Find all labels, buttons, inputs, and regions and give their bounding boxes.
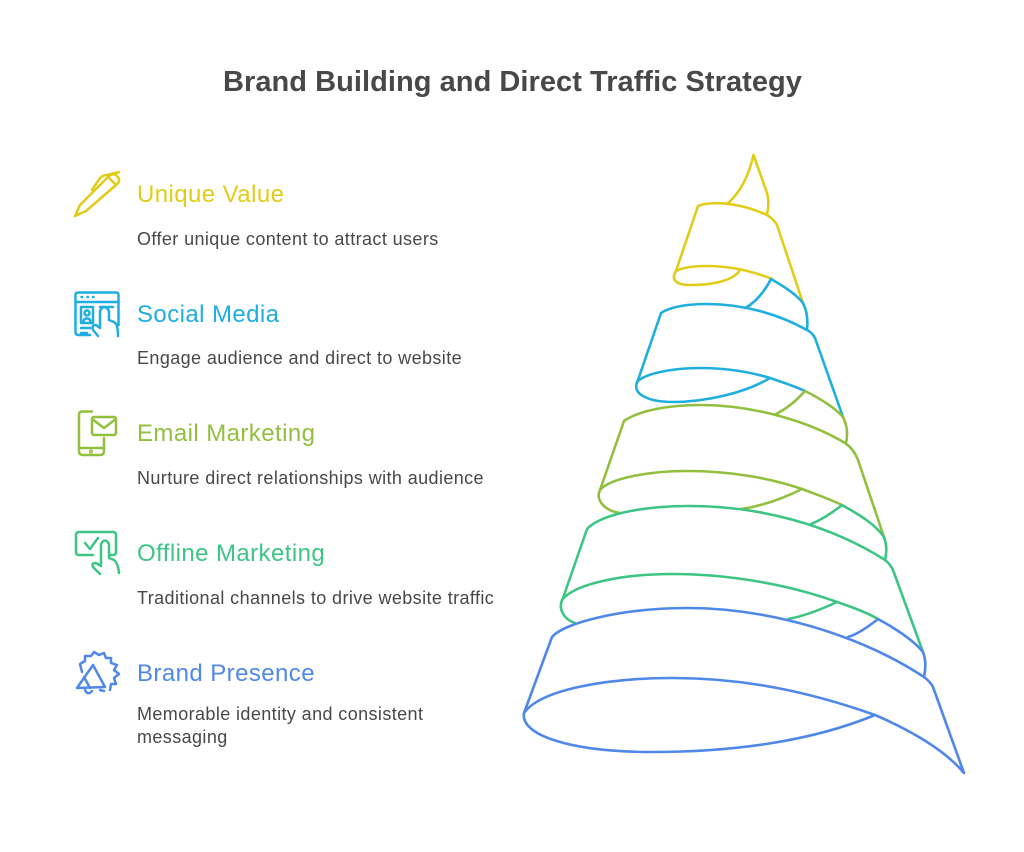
icon: social media browser — [76, 292, 118, 336]
spiral segment: sky blue — [636, 279, 843, 417]
spiral segment: blue — [524, 608, 964, 773]
heading: Social Media: Social Media — [137, 301, 279, 328]
text: Brand Presence description — [137, 704, 423, 747]
spiral cone — [524, 155, 964, 773]
heading: Email Marketing: Email Marketing — [137, 420, 315, 447]
text: Unique Value description: Offer unique content to attract users — [137, 229, 439, 249]
spiral segment: emerald green — [561, 505, 923, 652]
text: Social Media description: Engage audience and direct to website — [137, 348, 462, 368]
icon: pen — [75, 172, 119, 216]
text: Offline Marketing description: Traditional channels to drive website traffic — [137, 588, 494, 608]
heading: Unique Value: Unique Value — [137, 181, 284, 208]
text: Brand Presence description: messaging — [137, 727, 228, 747]
icon: megaphone badge — [77, 652, 119, 693]
heading: Brand Presence: Brand Presence — [137, 660, 315, 687]
heading: Offline Marketing: Offline Marketing — [137, 540, 325, 567]
icon: phone with envelope — [79, 412, 116, 455]
title: Brand Building and Direct Traffic Strategy — [223, 66, 802, 98]
text: Brand Presence description: Memorable identity and consistent — [137, 704, 423, 724]
icon: offline touch checkmark — [76, 532, 119, 574]
text: Email Marketing description: Nurture direct relationships with audience — [137, 468, 484, 488]
spiral segment: olive green — [599, 391, 885, 540]
spiral segment: yellow — [674, 155, 803, 303]
